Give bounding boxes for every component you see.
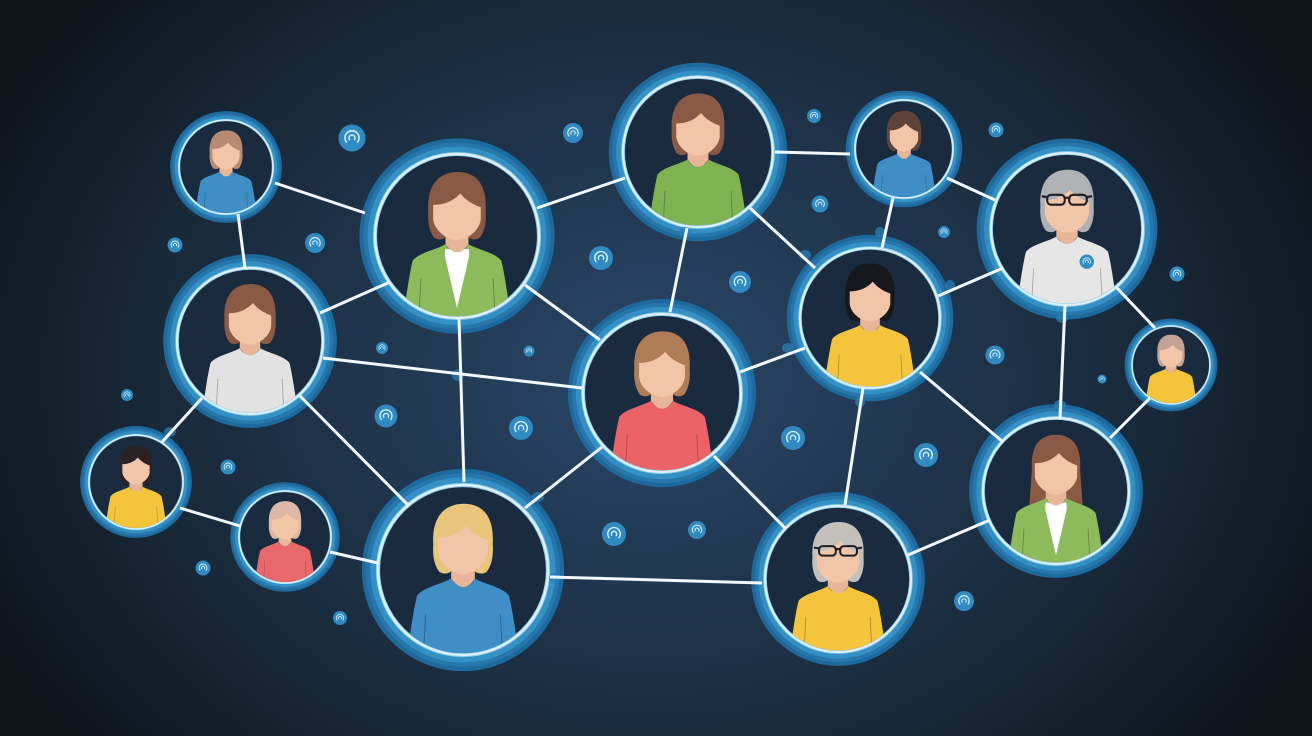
node: grey-haired woman with glasses in yellow [751, 492, 925, 666]
node: woman in green top [609, 63, 787, 241]
node: grey-haired woman with glasses and badge [977, 139, 1157, 319]
node: blonde woman in blue [362, 469, 564, 671]
node: small woman in coral, lower left [230, 482, 340, 592]
node: small person in blue, top [846, 91, 962, 207]
node: woman in light grey top [163, 254, 337, 428]
node: small person in yellow, left [80, 426, 192, 538]
node: black-haired woman in yellow [787, 235, 953, 401]
connection lines [162, 152, 1155, 583]
node: woman in green jacket [359, 138, 555, 334]
node: small woman in blue, top left [170, 111, 282, 223]
node: woman in coral, center [568, 299, 756, 487]
scattered small icons [121, 109, 1184, 625]
node: long-haired woman in green jacket [969, 404, 1143, 578]
node: small woman in yellow, right [1125, 319, 1217, 411]
